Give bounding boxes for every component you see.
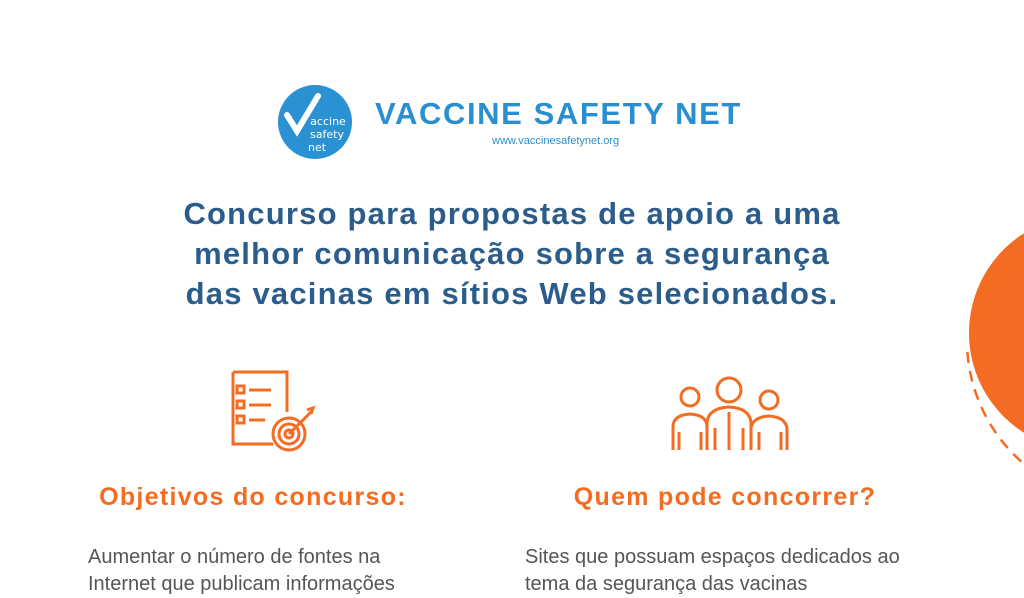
title bbox=[183, 196, 841, 311]
url: www.vaccinesafetynet.org bbox=[492, 135, 619, 147]
text: objectives: Aumentar o número de fontes na bbox=[88, 546, 380, 568]
text: who bbox=[525, 546, 900, 595]
title: Concurso para propostas de apoio a uma bbox=[183, 196, 841, 231]
text: who: tema da segurança das vacinas bbox=[525, 573, 807, 595]
icon: people group bbox=[672, 376, 788, 450]
brand name: VACCINE SAFETY NET bbox=[375, 96, 742, 131]
text: who: Sites que possuam espaços dedicados ao bbox=[525, 546, 900, 568]
icon: checklist with target bbox=[232, 370, 316, 452]
title: melhor comunicação sobre a segurança bbox=[194, 236, 830, 271]
logo: accine bbox=[310, 115, 346, 128]
heading: who can apply: Quem pode concorrer? bbox=[574, 483, 876, 511]
logo: net bbox=[308, 141, 327, 154]
title: das vacinas em sítios Web selecionados. bbox=[186, 276, 838, 311]
logo: safety bbox=[310, 128, 344, 141]
heading: objectives: Objetivos do concurso: bbox=[99, 483, 407, 511]
text: objectives bbox=[88, 546, 395, 595]
text: objectives: Internet que publicam informações bbox=[88, 573, 395, 595]
logo bbox=[278, 85, 352, 159]
